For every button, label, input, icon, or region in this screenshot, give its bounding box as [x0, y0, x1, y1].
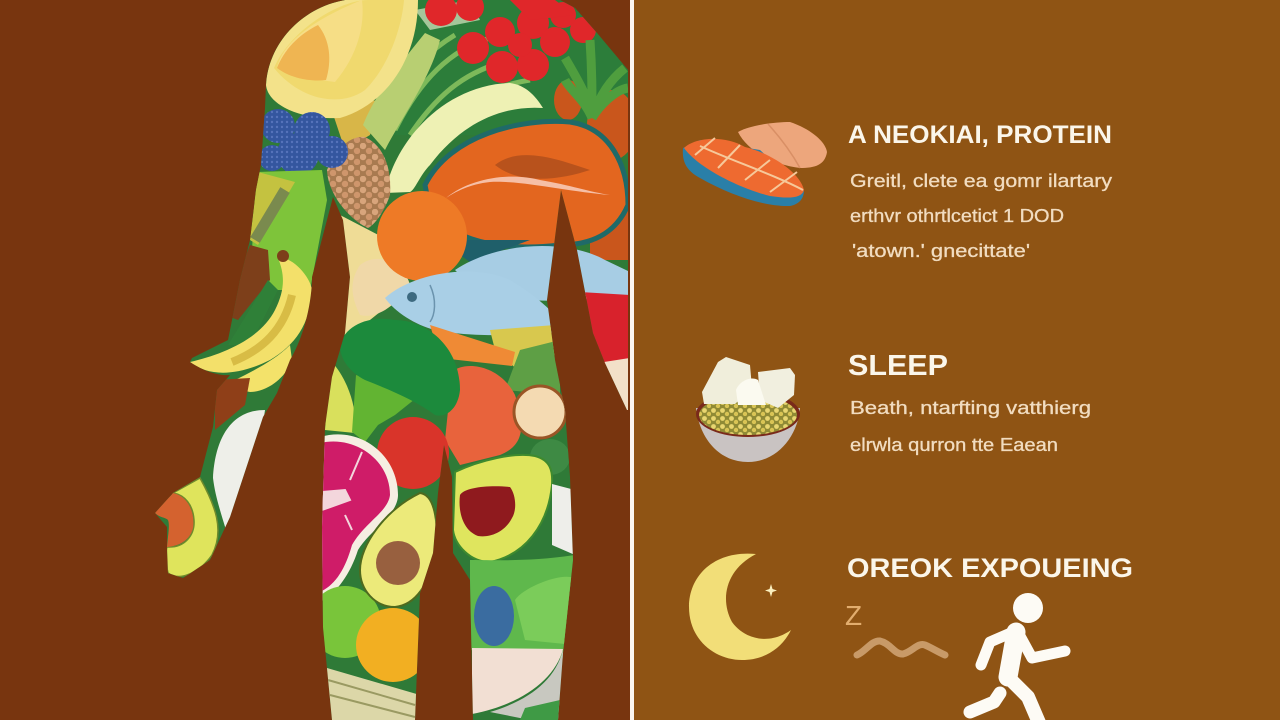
broccoli crown [340, 319, 460, 416]
left background [0, 0, 632, 720]
protein text line 1: Greitl, clete ea gomr ilartary [850, 171, 1112, 191]
corn and peas [490, 325, 554, 367]
green arm [250, 170, 327, 290]
human body silhouette made of food [150, 0, 637, 720]
red apple right [585, 292, 628, 365]
sleep letter Z: Z [845, 600, 862, 631]
cabbage crescent [385, 83, 543, 193]
icon: star [765, 584, 777, 597]
chest cream [341, 216, 384, 335]
salad leaf [515, 577, 575, 645]
avocado hand [166, 478, 218, 576]
green peas [508, 342, 560, 393]
icon: crescent moon [689, 554, 791, 660]
blue ball [474, 586, 514, 646]
banana back [235, 345, 292, 392]
asparagus [255, 190, 285, 240]
banana front [190, 258, 312, 373]
brown forearm [215, 378, 250, 430]
orange fruit [377, 191, 467, 281]
avocado right [453, 455, 552, 562]
white crescent [213, 410, 265, 530]
yellow fruit [356, 608, 430, 682]
panel: sleep [696, 350, 1091, 462]
avocado hand pit [155, 493, 193, 547]
golden patch [334, 100, 375, 144]
icon: fish and chicken [683, 122, 827, 206]
panel: exposure [689, 553, 1133, 720]
sleep text line 2: elrwla qurron tte Eaean [850, 435, 1058, 455]
bowl stripes [327, 668, 420, 720]
carrot [430, 325, 515, 366]
avocado centre [360, 493, 437, 607]
salmon pink band [446, 177, 610, 198]
wave [857, 641, 945, 655]
orange lumps right [554, 80, 628, 260]
divider [630, 0, 634, 720]
green corner [520, 700, 560, 720]
cream slice [514, 386, 566, 438]
exposure heading: OREOK EXPOUEING [847, 553, 1133, 583]
white block [552, 484, 575, 555]
broccoli stem [352, 375, 420, 442]
front fish [385, 272, 570, 335]
yellow fruit [266, 0, 418, 118]
dark leaf [260, 280, 278, 292]
meat steak [320, 434, 398, 602]
banana cap [277, 250, 289, 262]
tomato [377, 417, 449, 489]
orange-red fruit [445, 366, 521, 465]
blueberries [261, 109, 348, 172]
cream right [604, 358, 630, 410]
carrot top greens [565, 40, 628, 118]
grey bowl edge [490, 650, 565, 720]
green salad [470, 555, 575, 660]
artichoke [530, 439, 570, 475]
protein text line 2: erthvr othrtlcetict 1 DOD [850, 206, 1064, 226]
brown root [232, 245, 270, 320]
salmon dark patch [495, 155, 590, 179]
leafy greens [380, 0, 630, 135]
rice bowl [472, 648, 563, 714]
protein heading: A NEOKIAI, PROTEIN [848, 121, 1112, 149]
banana seeds [232, 295, 292, 362]
avocado slice left leg [325, 360, 355, 433]
potato [352, 259, 410, 316]
salmon half [425, 121, 628, 247]
protein text line 3: 'atown.' gnecittate' [852, 241, 1030, 261]
back fish [455, 246, 630, 301]
panel: protein [683, 121, 1112, 261]
sleep text line 1: Beath, ntarfting vatthierg [850, 398, 1091, 418]
right background [632, 0, 1280, 720]
sleep heading: SLEEP [848, 350, 948, 382]
pale green leaf [363, 33, 440, 150]
buckwheat [327, 137, 390, 228]
yellow-green arm strip [250, 172, 295, 245]
green apple [309, 586, 381, 658]
red berries [425, 0, 596, 83]
icon: runner [970, 593, 1065, 720]
dark teal below [460, 240, 530, 262]
icon: tofu bowl [696, 357, 800, 462]
